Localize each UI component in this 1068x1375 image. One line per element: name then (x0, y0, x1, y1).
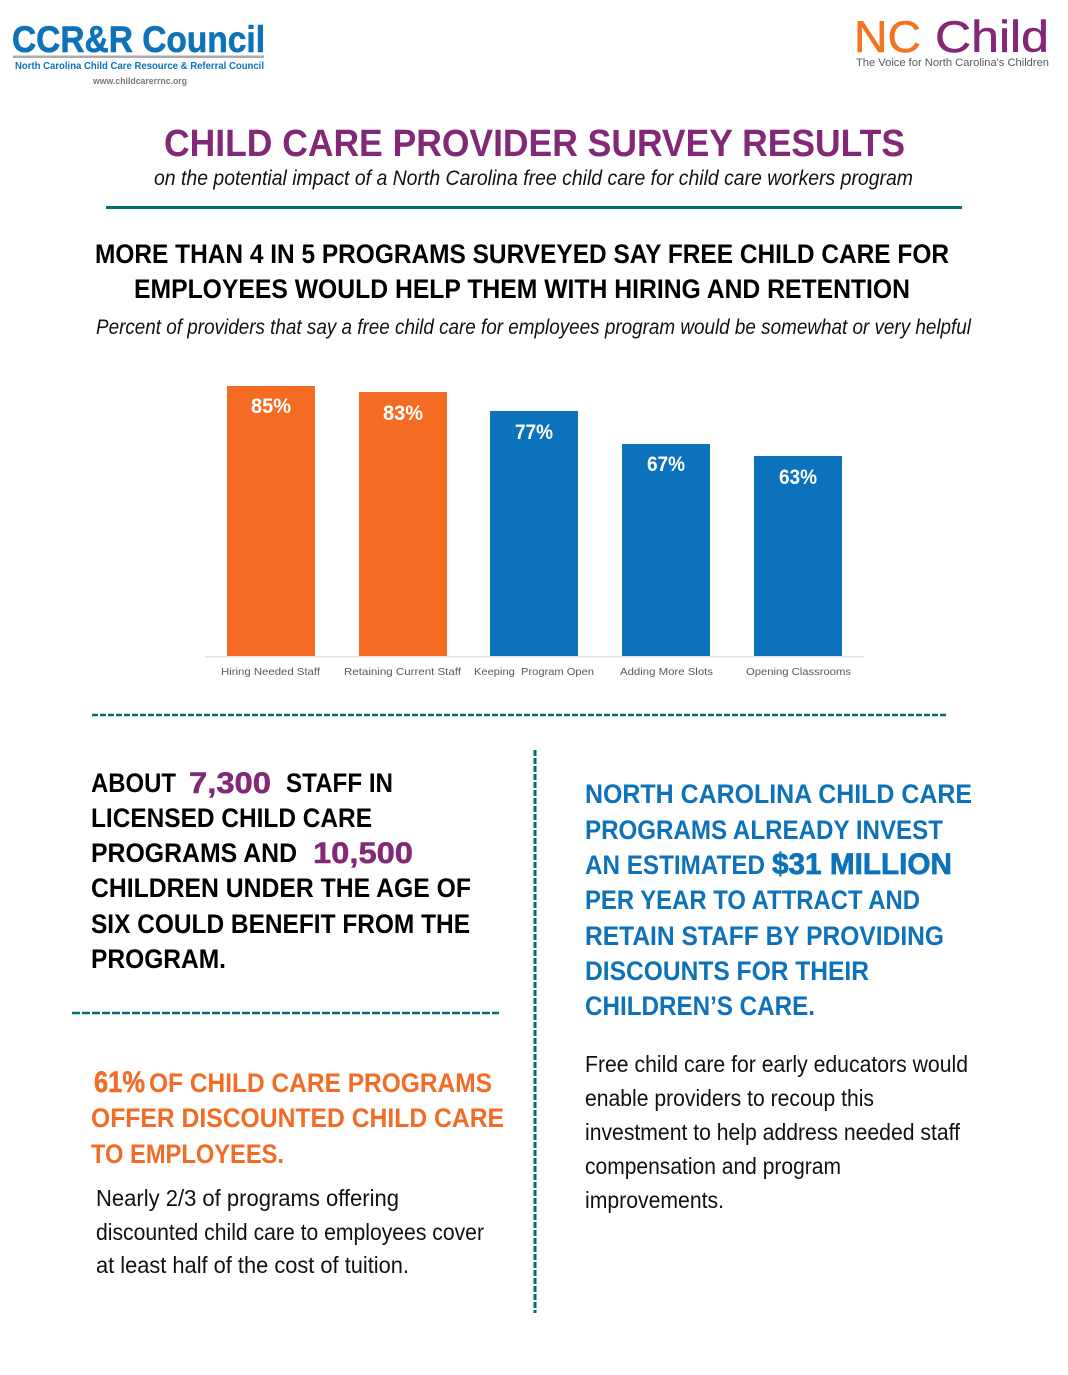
text: discount detail (96, 1185, 484, 1278)
stat: $31 million investment: AN ESTIMATED (585, 850, 765, 880)
logo: CCR&R Council: CCR&R Council (12, 18, 265, 60)
chart heading (95, 239, 949, 304)
chart heading: EMPLOYEES WOULD HELP THEM WITH HIRING AND RETENTION (134, 274, 910, 304)
bar: Hiring Needed Staff 85%: Hiring Needed Staff (221, 666, 320, 678)
stat: 61% discounted care (91, 1066, 504, 1169)
bar: Keeping Program Open 77%: 77% (515, 421, 553, 444)
text: discount detail: at least half of the cost of tuition. (96, 1252, 409, 1278)
bar: Hiring Needed Staff 85%: 85% (251, 395, 291, 418)
text: recoup investment: investment to help address needed staff (585, 1119, 960, 1145)
bar: Adding More Slots 67%: 67% (647, 453, 685, 476)
bar: Opening Classrooms 63%: 63% (779, 466, 817, 489)
bar: Adding More Slots 67%: Adding More Slots (620, 666, 713, 678)
text: recoup investment (585, 1051, 968, 1213)
stat: 61% discounted care: OFFER DISCOUNTED CHILD CARE (91, 1103, 504, 1133)
chart subtitle: Percent of providers that say a free child care for employees program would be somewhat or very helpful (96, 316, 972, 339)
stat: 61% discounted care: TO EMPLOYEES. (91, 1139, 284, 1169)
stat: $31 million investment: DISCOUNTS FOR THEIR (585, 956, 869, 986)
logo: NC Child: NC (854, 13, 921, 62)
bar: Hiring Needed Staff 85% (221, 386, 320, 678)
stat: staff and children (91, 767, 471, 974)
text: recoup investment: compensation and program (585, 1153, 841, 1179)
text: recoup investment: enable providers to recoup this (585, 1085, 874, 1111)
logo: CCR&R Council: www.childcarerrnc.org (92, 76, 187, 86)
stat: $31 million investment (585, 779, 972, 1021)
stat: $31 million investment: CHILDREN’S CARE. (585, 991, 815, 1021)
logo: CCR&R Council (12, 18, 265, 86)
text: discount detail: discounted child care to employees cover (96, 1219, 484, 1245)
bar: Opening Classrooms 63%: Opening Classrooms (746, 666, 851, 678)
stat: $31 million investment: RETAIN STAFF BY PROVIDING (585, 921, 944, 951)
stat: staff and children: PROGRAM. (91, 944, 226, 974)
bar: Opening Classrooms 63% (746, 456, 851, 678)
stat: staff and children: 10,500 (313, 837, 413, 870)
title: CHILD CARE PROVIDER SURVEY RESULTS (164, 123, 905, 165)
stat: staff and children: CHILDREN UNDER THE AGE OF (91, 873, 471, 903)
bar: Retaining Current Staff 83%: 83% (383, 402, 423, 425)
stat: staff and children: STAFF IN (286, 768, 393, 798)
stat: staff and children: ABOUT (91, 768, 176, 798)
stat: staff and children: PROGRAMS AND (91, 838, 297, 868)
logo: NC Child: Child (935, 13, 1049, 62)
stat: $31 million investment: PROGRAMS ALREADY INVEST (585, 815, 943, 845)
stat: 61% discounted care: OF CHILD CARE PROGRAMS (149, 1068, 492, 1098)
logo: NC Child: The Voice for North Carolina's Children (856, 57, 1049, 69)
bar: Retaining Current Staff 83%: Retaining Current Staff (344, 666, 461, 678)
subtitle: on the potential impact of a North Carolina free child care for child care workers program (154, 167, 913, 190)
text: recoup investment: Free child care for early educators would (585, 1051, 968, 1077)
bar: Retaining Current Staff 83% (344, 392, 461, 678)
chart heading: MORE THAN 4 IN 5 PROGRAMS SURVEYED SAY FREE CHILD CARE FOR (95, 239, 949, 269)
stat: $31 million investment: NORTH CAROLINA CHILD CARE (585, 779, 972, 809)
stat: staff and children: LICENSED CHILD CARE (91, 803, 372, 833)
logo: NC Child (854, 13, 1049, 69)
stat: staff and children: 7,300 (189, 767, 271, 800)
stat: $31 million investment: PER YEAR TO ATTRACT AND (585, 885, 920, 915)
text: discount detail: Nearly 2/3 of programs offering (96, 1185, 399, 1211)
bar: Adding More Slots 67% (620, 444, 713, 678)
bar: Keeping Program Open 77% (474, 411, 594, 678)
stat: staff and children: SIX COULD BENEFIT FROM THE (91, 909, 470, 939)
text: recoup investment: improvements. (585, 1187, 724, 1213)
bar: Keeping Program Open 77%: Keeping Program Open (474, 666, 594, 678)
bar chart (205, 386, 864, 678)
logo: CCR&R Council: North Carolina Child Care Resource & Referral Council (15, 60, 264, 72)
stat: 61% discounted care: 61% (94, 1066, 145, 1099)
stat: $31 million investment: $31 MILLION (772, 848, 952, 881)
